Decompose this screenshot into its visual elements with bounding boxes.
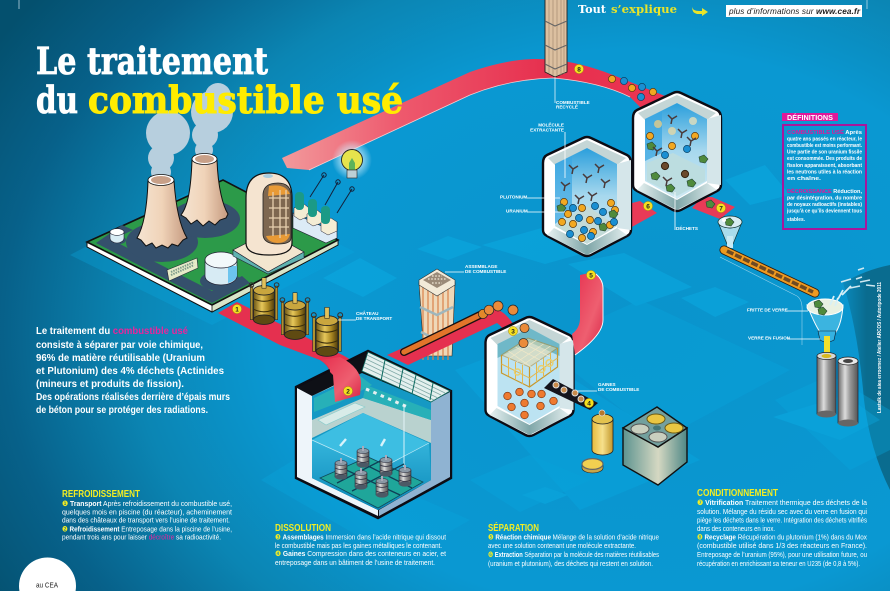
label: gaines de combustible: GAINES: [598, 382, 616, 387]
title: Le traitement: [36, 39, 268, 83]
header: tout s'explique: [578, 2, 677, 16]
badge 6: 6: [646, 203, 650, 210]
water: [312, 413, 429, 470]
text block: conditionnement: (combustible utilisé dans 1/3 des réacteurs en France).: [697, 541, 867, 550]
intro text: et Plutonium) des 4% déchets (Actinides: [36, 366, 224, 377]
pool grille: [362, 352, 450, 402]
extraction tank: [543, 137, 631, 256]
label: molécule extractante: MOLÉCULE: [538, 122, 564, 128]
text block: conditionnement: ❽ Recyclage Récupération du plutonium (1%) dans du Mox: [697, 532, 867, 542]
ribbon step 7: [692, 197, 735, 219]
text block: refroidissement: dans des châteaux de transport vers l’usine de traitement.: [62, 516, 230, 524]
text block: refroidissement: REFROIDISSEMENT: [62, 489, 140, 500]
vitrification funnel: [807, 268, 875, 356]
label: verre en fusion: VERRE EN FUSION: [748, 336, 791, 340]
text block: dissolution: ❸ Assemblages Immersion dans l’acide nitrique qui dissout: [275, 532, 446, 542]
text block: refroidissement: ❷ Refroidissement Entreposage dans la piscine de l’usine,: [62, 524, 232, 534]
transformers: [293, 173, 354, 243]
label: combustible recyclé: COMBUSTIBLE: [556, 100, 590, 105]
text block: conditionnement: ❼ Vitrification Traitement thermique des déchets de la: [697, 498, 868, 507]
waste container: [623, 407, 687, 485]
small tank: [110, 229, 124, 243]
nuclear plant: [87, 154, 354, 312]
intro text: 96% de matière réutilisable (Uranium: [36, 353, 205, 364]
definitions panel: est consommée. Des produits de: [787, 156, 862, 162]
red ribbon steps 1-2: [218, 302, 355, 372]
reactor base: [233, 232, 304, 274]
light bulb: [332, 140, 372, 180]
cooling tower right: [181, 154, 228, 226]
leader lines tank: [527, 132, 565, 212]
header: tout s'explique: s’explique: [611, 2, 677, 16]
text block: conditionnement: solution. Mélange du résidu sec avec du verre en fusion qui: [697, 507, 867, 516]
badge 5: [586, 270, 596, 280]
conveyor: [720, 250, 815, 345]
label: château de transport: DE TRANSPORT: [356, 316, 392, 321]
label: château de transport: CHÂTEAU: [356, 311, 378, 316]
recycled fuel column: [545, 0, 567, 103]
label: gaines de combustible: DE COMBUSTIBLE: [598, 387, 639, 392]
service building: [167, 258, 198, 281]
badge 1: [232, 304, 242, 314]
fuel assembly: [419, 269, 464, 360]
text block: refroidissement: pendant trois ans pour laisser décroître sa radioactivité.: [62, 532, 221, 542]
badge 3: 3: [511, 328, 515, 335]
badge 7: 7: [719, 205, 723, 212]
pool left wall: [297, 388, 378, 516]
cooling pool building: [296, 351, 451, 518]
text block: refroidissement: ❶ Transport Après refroidissement du combustible usé,: [62, 499, 232, 508]
intro text: Le traitement du combustible usé: [36, 326, 188, 337]
reactor dome: [246, 173, 292, 255]
text block: séparation: ❺ Réaction chimique Mélange de la solution d’acide nitrique: [488, 532, 659, 542]
badge 4: [584, 398, 594, 408]
red ribbon step 5: [572, 272, 603, 355]
definitions panel: fission apparaissent, absorbant: [787, 163, 862, 169]
label: molécule extractante: EXTRACTANTE: [530, 127, 564, 132]
text block: dissolution: DISSOLUTION: [275, 523, 331, 534]
label: combustible recyclé: RECYCLÉ: [556, 103, 578, 110]
definitions panel: stables.: [787, 217, 805, 223]
badge 8: 8: [577, 66, 581, 73]
definitions panel: combustible est moins performant.: [787, 143, 862, 149]
badge 4: 4: [587, 400, 591, 407]
text block: dissolution: [275, 523, 446, 567]
definitions panel: quatre ans passés en réacteur, le: [787, 136, 862, 142]
badge 2: [343, 386, 353, 396]
smoke plumes: [146, 83, 233, 182]
badge 3: [508, 326, 518, 336]
badge 6: [643, 201, 653, 211]
definitions panel: COMBUSTIBLE USÉ Après: [787, 128, 862, 136]
au CEA badge: au CEA: [36, 580, 58, 590]
au CEA badge: [19, 558, 76, 591]
funnel: [718, 216, 742, 248]
intro text: Des opérations réalisées derrière d’épais murs: [36, 392, 230, 403]
definitions panel: jusqu’à ce qu’ils deviennent tous: [786, 208, 862, 214]
title: [36, 39, 403, 122]
red ribbon step 3: [387, 308, 520, 365]
text block: conditionnement: [697, 488, 868, 568]
text block: conditionnement: CONDITIONNEMENT: [697, 488, 778, 499]
ribbon drop into pool: [320, 357, 361, 402]
crop marks: [19, 0, 867, 9]
label: plutonium: PLUTONIUM: [500, 194, 527, 200]
text block: dissolution: entreposage dans un bâtiment de l’usine de traitement.: [275, 558, 435, 567]
arrow icon: [692, 7, 708, 16]
website box: plus d’informations sur www.cea.fr: [728, 7, 861, 16]
definitions panel: [783, 125, 866, 229]
pool right wall: [379, 392, 450, 516]
ribbon step 6: [628, 201, 657, 228]
definitions heading: [782, 113, 838, 122]
definitions panel: de noyaux radioactifs (instables): [787, 202, 862, 208]
intro text: (mineurs et produits de fission).: [36, 379, 184, 390]
dissolver tank: [486, 317, 574, 436]
header: tout s'explique: Tout: [578, 2, 607, 16]
title: du: [36, 78, 78, 122]
fuel rod being cut: [404, 301, 518, 352]
label: assemblage de combustible: DE COMBUSTIBLE: [465, 269, 506, 274]
text block: refroidissement: quelques mois en piscine (du réacteur), acheminement: [62, 508, 232, 516]
badge 1: 1: [235, 306, 239, 313]
text block: séparation: SÉPARATION: [488, 521, 539, 534]
intro text: de béton pour se protéger des radiations.: [36, 405, 208, 416]
definitions heading: DÉFINITIONS: [787, 113, 833, 122]
text block: séparation: avec une solution contenant une molécule extractante.: [488, 541, 636, 550]
separation tank: [633, 92, 721, 230]
transport casks: [249, 278, 356, 356]
casks in pool: [335, 446, 411, 498]
label: fritte de verre: FRITTE DE VERRE: [747, 308, 788, 312]
text block: séparation: [488, 521, 659, 568]
definitions panel: par désintégration, du nombre: [787, 196, 862, 202]
text block: séparation: ❻ Extraction Séparation par la molécule des matières réutilisables: [488, 550, 659, 559]
pool floor: [320, 457, 423, 508]
definitions panel: les neutrons utiles à la réaction: [787, 170, 862, 176]
definitions panel: Une partie de son uranium fissile: [787, 150, 862, 156]
definitions panel: en chaîne.: [787, 176, 822, 182]
hull conveyor: [544, 379, 598, 410]
text block: séparation: (uranium et plutonium), des déchets qui restent en solution.: [488, 559, 653, 568]
glass cylinders: [817, 352, 858, 426]
badge 5: 5: [589, 272, 593, 279]
text block: dissolution: le combustible mais pas les gaines métalliques le contenant.: [275, 541, 442, 550]
intro text: [36, 326, 230, 416]
badge 7: [716, 203, 726, 213]
pool interior: [312, 373, 431, 510]
red ribbon to recycled fuel, step 8: [282, 59, 665, 170]
text block: conditionnement: dans des conteneurs en inox.: [697, 524, 775, 533]
label: déchets: DÉCHETS: [676, 224, 698, 231]
hull canister: [582, 410, 613, 473]
badge 2: 2: [346, 388, 350, 395]
label: assemblage de combustible: ASSEMBLAGE: [465, 264, 497, 269]
credit line: Lastalk de aiea erroomez / Atelier ARCOS / Autoripode 2011: [877, 282, 883, 413]
intro text: consiste à séparer par voie chimique,: [36, 340, 203, 351]
badge 8: [574, 64, 584, 74]
storage tank: [205, 252, 237, 285]
title: combustible usé: [88, 78, 403, 122]
label: uranium: URANIUM: [506, 208, 528, 214]
glass labels: [786, 311, 820, 339]
text block: refroidissement: [62, 489, 232, 542]
cooling tower left: [137, 174, 187, 248]
text block: dissolution: ❹ Gaines Compression dans des conteneurs en acier, et: [275, 549, 446, 558]
waste on ribbon: [706, 200, 715, 208]
definitions panel: DÉCROISSANCE Réduction,: [787, 187, 863, 195]
